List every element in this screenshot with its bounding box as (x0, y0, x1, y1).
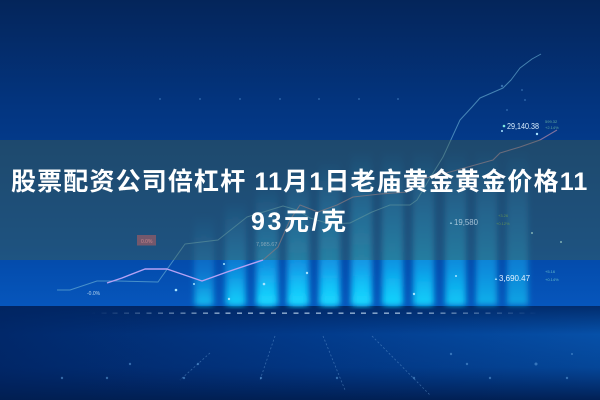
column base glow (197, 265, 463, 305)
label: 19,580: +0.12% (496, 221, 510, 226)
label: 19,580: 19,580 (454, 217, 478, 227)
label: 29,140.38 (503, 119, 559, 131)
chart line: pink series (263, 130, 557, 260)
title: 93元/克 (251, 208, 349, 236)
label: 3,690.47: ▲ (494, 276, 498, 281)
label: 3,690.47: +5.16 (545, 269, 556, 274)
label: 19,580: ▲ (449, 220, 453, 225)
label: 3,690.47: +0.14% (545, 277, 559, 282)
label: 3,690.47 (494, 269, 559, 283)
label: 3,690.47: 3,690.47 (499, 273, 530, 283)
label: 19,580 (449, 213, 510, 227)
label: red badge (137, 235, 156, 246)
translucent band (0, 140, 600, 260)
sparkle dots (175, 130, 562, 300)
glowing columns (194, 150, 528, 305)
chart line: teal series (57, 54, 541, 290)
label: 29,140.38: 29,140.38 (507, 121, 539, 131)
dashed baseline (90, 312, 540, 314)
label: 19,580: +3.26 (498, 213, 509, 218)
title: 股票配资公司倍杠杆 11月1日老庙黄金黄金价格11 (11, 168, 588, 196)
chart line: purple series (107, 260, 263, 283)
label: red badge: 0.0% (141, 239, 153, 245)
label: 29,140.38: 599.32 (545, 119, 558, 124)
label: 29,140.38: +2.14% (545, 125, 559, 130)
label: 4.0%: -0.0% (87, 291, 101, 297)
upper dots (61, 85, 573, 379)
label: 7,985.67: 7,985.67 (256, 242, 277, 248)
perspective floor lines (180, 336, 430, 395)
